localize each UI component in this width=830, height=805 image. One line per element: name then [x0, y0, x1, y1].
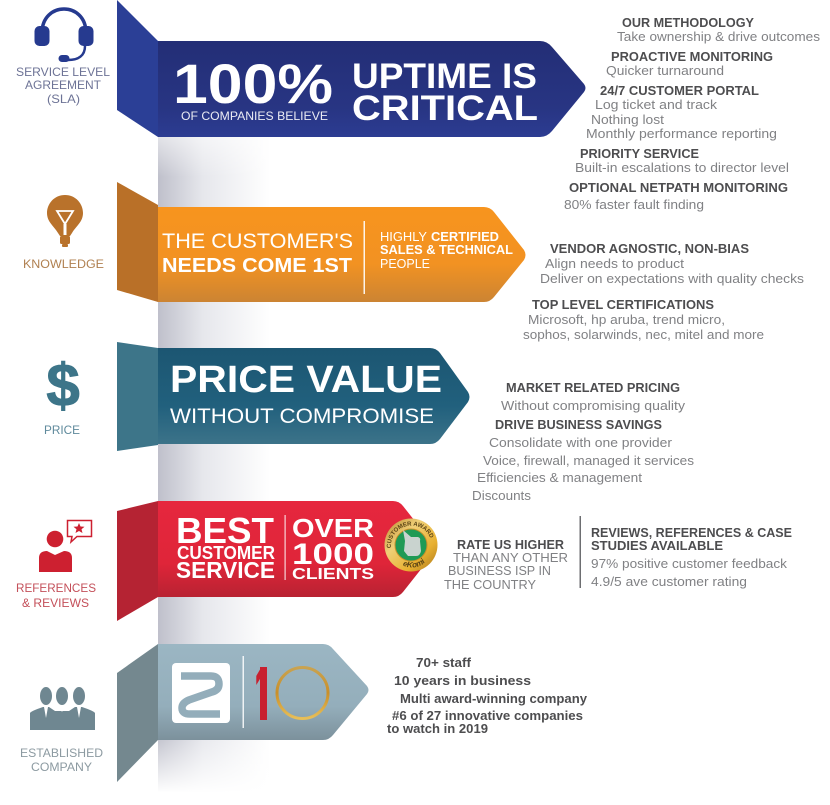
text block: service details: 80% faster fault finding: [564, 198, 704, 212]
icon: group of people: [30, 687, 95, 730]
icon: dollar sign: $: [46, 352, 80, 419]
panel: established company: [20, 644, 368, 782]
grey shadow column behind ribbons: [158, 137, 270, 793]
text block: reviews and references: [591, 526, 792, 589]
text block: company facts: Multi award-winning company: [400, 692, 587, 706]
text block: service details: 24/7 CUSTOMER PORTAL: [600, 84, 759, 98]
headline: over 1000 clients: [292, 513, 374, 583]
text block: price details: [472, 381, 694, 503]
text block: price details: Consolidate with one provider: [489, 436, 672, 450]
panel: price: [44, 342, 470, 451]
text block: rate us higher: THAN ANY OTHER: [453, 551, 568, 565]
text block: service details: OUR METHODOLOGY: [622, 16, 755, 30]
text block: knowledge details: sophos, solarwinds, nec, mitel and more: [523, 328, 764, 342]
text block: service details: PROACTIVE MONITORING: [611, 50, 773, 64]
text block: reviews and references: 4.9/5 ave customer rating: [591, 575, 747, 589]
graphic: number 10: [256, 666, 330, 720]
label: service level agreement: [16, 65, 110, 106]
text block: knowledge details: VENDOR AGNOSTIC, NON-BIAS: [550, 242, 749, 256]
panel: references and reviews: [16, 501, 438, 621]
headline: best customer service: BEST: [176, 510, 274, 551]
subhead: of companies believe: OF COMPANIES BELIEVE: [181, 111, 328, 123]
text block: price details: MARKET RELATED PRICING: [506, 381, 680, 395]
headline: the customer's needs come 1st: THE CUSTOMER'S: [162, 230, 353, 253]
divider: [242, 656, 244, 728]
text block: price details: Discounts: [472, 489, 531, 503]
label: established company: COMPANY: [31, 760, 92, 774]
text block: price details: DRIVE BUSINESS SAVINGS: [495, 418, 662, 432]
divider: [284, 515, 286, 580]
icon: headset: [34, 9, 94, 62]
text block: service details: Quicker turnaround: [606, 64, 724, 78]
text block: service details: OPTIONAL NETPATH MONITORING: [569, 181, 788, 195]
text block: service details: Log ticket and track: [595, 98, 718, 112]
text block: knowledge details: Deliver on expectations with quality checks: [540, 272, 804, 286]
ribbon: 10 years: [158, 644, 368, 740]
icon: customer award badge: eKomi: [403, 558, 424, 568]
text block: rate us higher: BUSINESS ISP IN: [448, 564, 551, 578]
headline: 100%: 100%: [173, 52, 333, 115]
headline: over 1000 clients: 1000: [292, 538, 374, 571]
label: service level agreement: AGREEMENT: [25, 78, 102, 92]
text block: company facts: 70+ staff: [416, 656, 472, 670]
text block: knowledge details: Align needs to product: [545, 257, 685, 271]
graphic: number 10: 1: [254, 652, 270, 737]
icon: customer award badge: [384, 518, 438, 572]
subhead: highly certified people: [380, 230, 513, 271]
icon: person with review bubble: [39, 520, 92, 572]
panel: service level agreement: [16, 0, 586, 137]
text block: reviews and references: STUDIES AVAILABLE: [591, 539, 723, 553]
ribbon: price value: [158, 348, 470, 444]
text block: service details: Take ownership & drive outcomes: [617, 30, 820, 44]
headline: the customer's needs come 1st: [162, 230, 353, 277]
label: established company: [20, 746, 103, 774]
ribbon fold: red: [117, 501, 158, 621]
label: service level agreement: (SLA): [47, 92, 80, 106]
ribbon: customer needs: [158, 207, 526, 302]
text block: reviews and references: 97% positive customer feedback: [591, 557, 788, 571]
subhead: highly certified people: HIGHLY: [380, 230, 428, 244]
text block: rate us higher: RATE US HIGHER: [457, 538, 564, 552]
text block: service details: Built-in escalations to director level: [575, 161, 789, 175]
headline: uptime is critical: [352, 57, 538, 128]
headline: best customer service: SERVICE: [176, 557, 275, 583]
icon: light bulb: [47, 195, 83, 247]
headline: price value: PRICE VALUE: [170, 359, 442, 401]
text block: price details: Voice, firewall, managed it services: [483, 454, 694, 468]
subhead: highly certified people: CERTIFIED: [431, 230, 499, 244]
label: price: PRICE: [44, 423, 80, 437]
text block: service details: [564, 16, 820, 212]
text block: service details: Monthly performance reporting: [586, 127, 777, 141]
text block: price details: Without compromising quality: [501, 399, 686, 413]
text block: company facts: to watch in 2019: [387, 722, 488, 736]
label: references and reviews: REFERENCES: [16, 581, 96, 595]
text block: company facts: #6 of 27 innovative companies: [392, 709, 583, 723]
text block: rate us higher: [444, 538, 568, 592]
subhead: highly certified people: PEOPLE: [380, 257, 430, 271]
panel: knowledge: [23, 182, 526, 302]
text block: knowledge details: TOP LEVEL CERTIFICATIONS: [532, 298, 714, 312]
label: service level agreement: SERVICE LEVEL: [16, 65, 110, 79]
ribbon fold: grey: [117, 644, 158, 782]
icon: customer award badge: CUSTOMER AWARD: [386, 522, 434, 548]
subhead: highly certified people: SALES & TECHNICAL: [380, 243, 513, 257]
headline: best customer service: CUSTOMER: [177, 543, 275, 563]
ribbon: uptime: [158, 41, 586, 137]
divider: [364, 221, 365, 294]
label: established company: ESTABLISHED: [20, 746, 103, 760]
subhead: without compromise: WITHOUT COMPROMISE: [170, 405, 434, 428]
headline: the customer's needs come 1st: NEEDS COME 1ST: [162, 255, 352, 277]
headline: over 1000 clients: CLIENTS: [292, 566, 374, 583]
ribbon fold: blue: [117, 0, 158, 137]
label: references and reviews: & REVIEWS: [22, 596, 89, 610]
text block: reviews and references: REVIEWS, REFERENCES & CASE: [591, 526, 792, 540]
headline: uptime is critical: UPTIME IS: [352, 57, 537, 96]
text block: rate us higher: THE COUNTRY: [444, 578, 537, 592]
text block: service details: PRIORITY SERVICE: [580, 147, 699, 161]
label: references and reviews: [16, 581, 96, 610]
logo: white Z mark: [172, 663, 230, 723]
ribbon: best customer service: [158, 501, 434, 597]
text block: company facts: 10 years in business: [394, 674, 531, 688]
text block: price details: Efficiencies & management: [477, 471, 643, 485]
headline: best customer service: [176, 510, 275, 583]
headline: uptime is critical: CRITICAL: [352, 89, 538, 128]
label: knowledge: KNOWLEDGE: [23, 257, 104, 271]
ribbon fold: orange: [117, 182, 158, 302]
text block: company facts: [387, 656, 587, 736]
text block: service details: Nothing lost: [591, 113, 665, 127]
headline: over 1000 clients: OVER: [292, 513, 374, 543]
text block: knowledge details: [523, 242, 804, 342]
ribbon fold: teal: [117, 342, 158, 451]
text block: knowledge details: Microsoft, hp aruba, trend micro,: [528, 313, 725, 327]
